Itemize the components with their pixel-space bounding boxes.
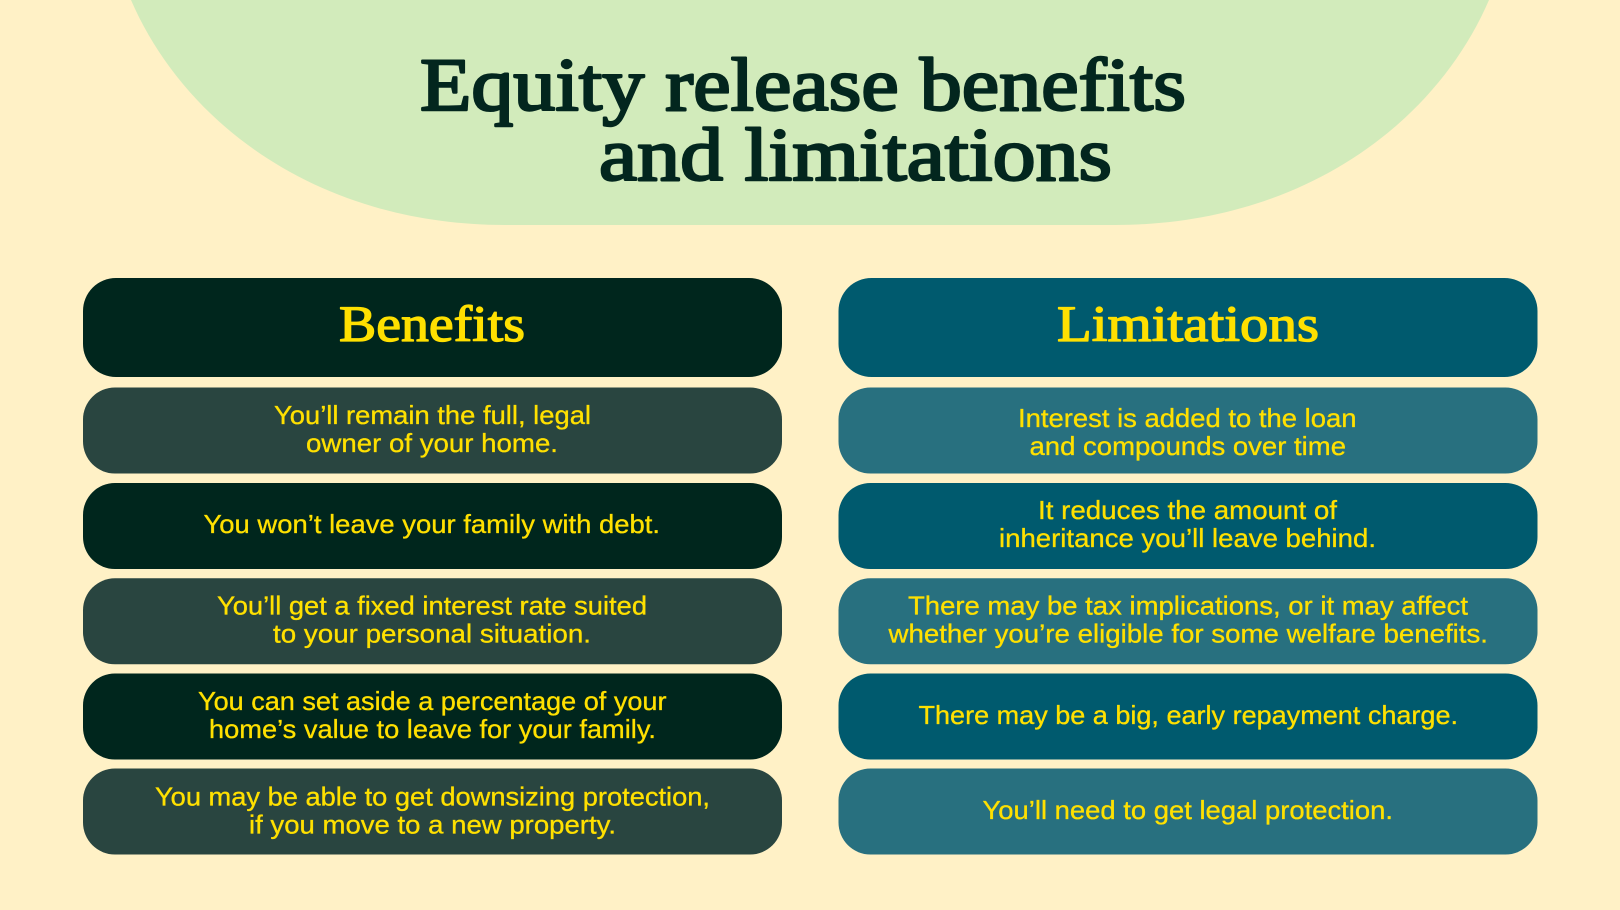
benefit 3: to your personal situation. <box>273 618 591 648</box>
limitation 2 <box>838 483 1538 569</box>
limitation 3: There may be tax implications, or it may affect <box>908 590 1469 620</box>
benefit 3 <box>83 578 782 664</box>
limitations heading: Limitations <box>1057 297 1319 353</box>
benefits heading <box>83 278 782 377</box>
panel: limitations <box>838 278 1538 854</box>
title <box>420 44 1186 197</box>
benefits heading: Benefits <box>339 297 525 353</box>
title banner <box>131 0 1489 225</box>
benefit 4: home’s value to leave for your family. <box>209 714 656 744</box>
limitation 2: inheritance you’ll leave behind. <box>999 523 1376 553</box>
benefit 2 <box>83 483 782 569</box>
title: Equity release benefits <box>420 44 1186 127</box>
benefit 1 <box>83 388 782 474</box>
limitation 5: You’ll need to get legal protection. <box>982 795 1393 825</box>
benefit 5 <box>83 768 782 854</box>
limitation 5 <box>838 768 1538 854</box>
limitation 4: There may be a big, early repayment charge. <box>918 700 1458 730</box>
benefit 5: if you move to a new property. <box>249 810 616 840</box>
limitation 3: whether you’re eligible for some welfare benefits. <box>887 618 1488 648</box>
title: and limitations <box>599 114 1112 197</box>
limitation 4 <box>838 674 1538 760</box>
panel: benefits <box>83 278 782 854</box>
benefit 4: You can set aside a percentage of your <box>198 686 667 716</box>
limitation 2: It reduces the amount of <box>1038 495 1338 525</box>
limitation 1: and compounds over time <box>1030 431 1346 461</box>
benefit 2: You won’t leave your family with debt. <box>204 509 660 539</box>
limitations heading <box>838 278 1538 377</box>
limitation 3 <box>838 578 1538 664</box>
limitation 1 <box>838 388 1538 474</box>
benefit 1: You’ll remain the full, legal <box>274 400 591 430</box>
limitation 1: Interest is added to the loan <box>1018 403 1356 433</box>
benefit 4 <box>83 674 782 760</box>
benefit 5: You may be able to get downsizing protection, <box>155 782 710 812</box>
benefit 1: owner of your home. <box>306 428 558 458</box>
benefit 3: You’ll get a fixed interest rate suited <box>217 590 647 620</box>
